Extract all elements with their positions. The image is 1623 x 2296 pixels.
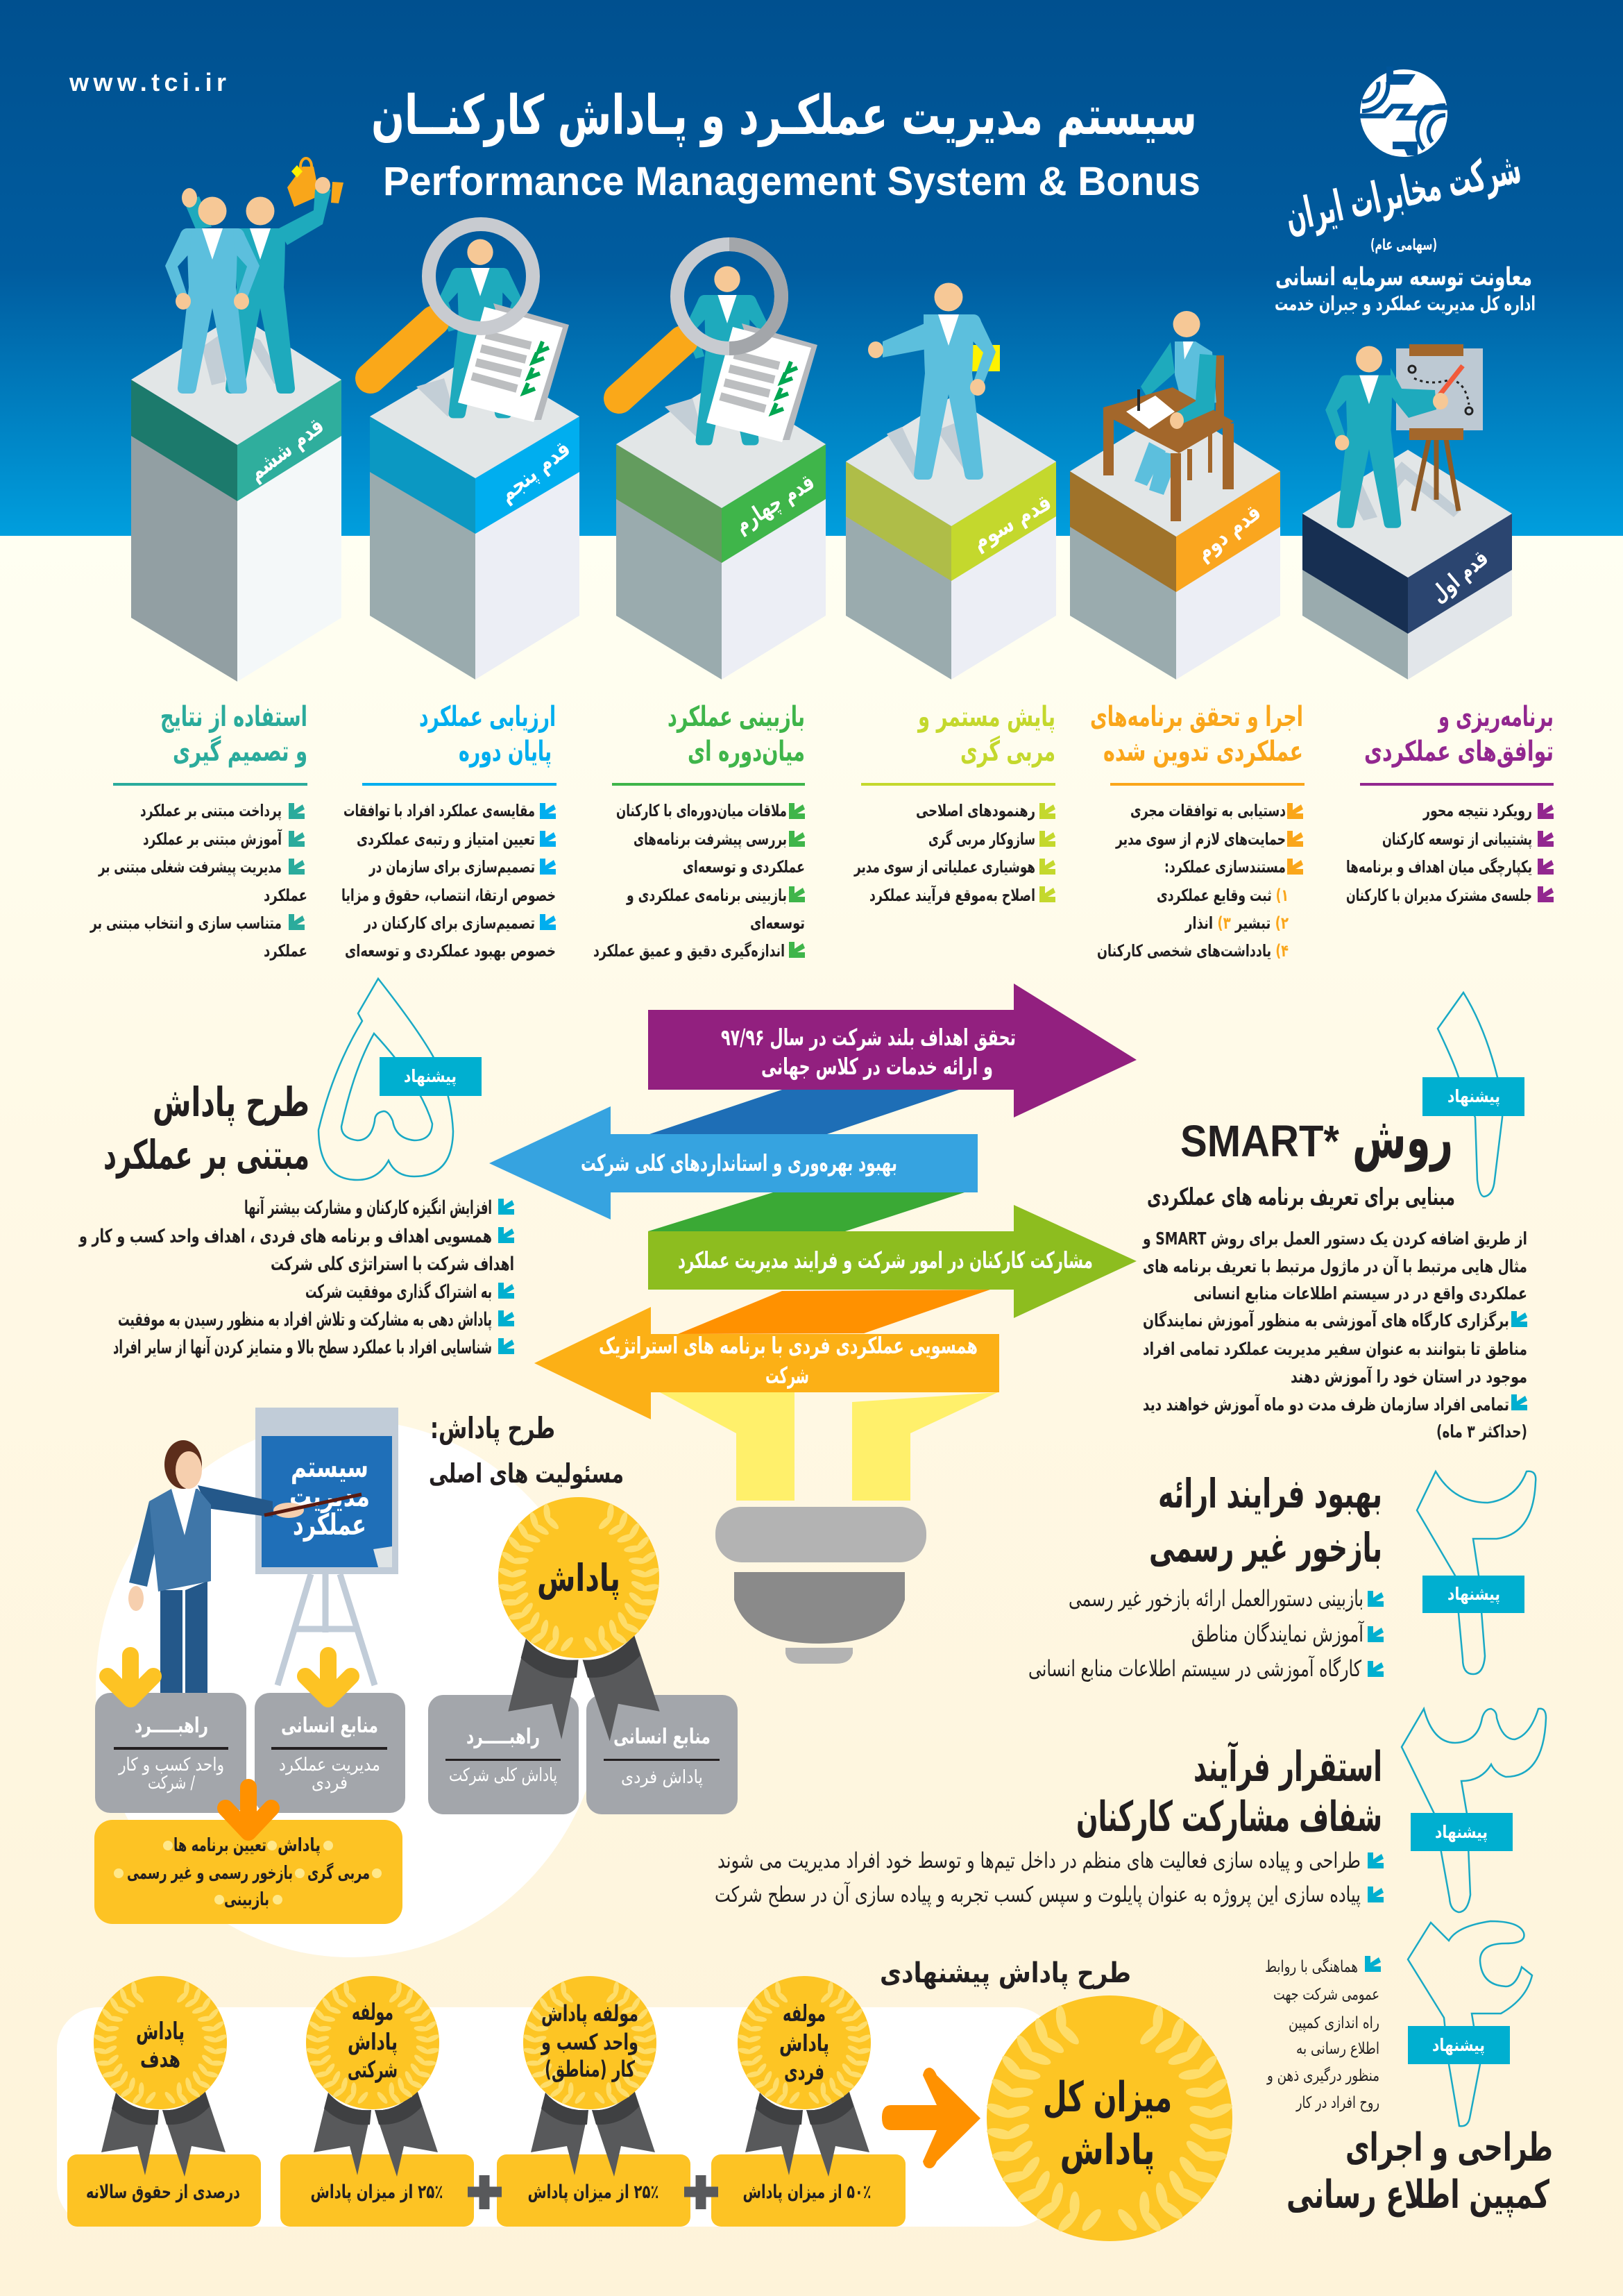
box: responsibilities list [94, 1820, 402, 1924]
arrow: down to list [226, 1787, 271, 1832]
numeral 5 outline [318, 979, 453, 1180]
box: strategy responsibility: راهبـــــرد [135, 1714, 208, 1738]
column 6 bullets: متناسب سازی و انتخاب مبتنی بر [90, 913, 282, 933]
column 5 bullets: مقایسه‌ی عملکرد افراد با توافقات [343, 801, 535, 820]
bullets: آموزش نمایندگان مناطق [1191, 1620, 1365, 1647]
figure: coach with folder [868, 283, 1000, 480]
column 2 heading: اجرا و تحقق برنامه‌های [1090, 701, 1303, 733]
fold: green [648, 1192, 965, 1231]
list text: تعیین برنامه ها [173, 1835, 266, 1856]
board text: عملکرد [293, 1508, 366, 1542]
bullets [78, 1196, 514, 1358]
step 4 label: قدم چهارم [730, 469, 819, 538]
suggestion label: پیشنهاد [404, 1066, 457, 1087]
suggestion 5 [78, 979, 514, 1358]
figure: two winners with trophy [165, 158, 343, 394]
heading: main responsibilities [429, 1411, 624, 1489]
arrow: purple: و ارائه خدمات در کلاس جهانی [761, 1053, 993, 1081]
arrow: orange: همسویی عملکردی فردی با برنامه های استراتژیک [599, 1332, 978, 1360]
arrow: green: مشارکت کارکنان در امور شرکت و فرایند مدیریت عملکرد [678, 1247, 1093, 1274]
suggestion 2 [1028, 1470, 1536, 1682]
component: business unit bonus [497, 1976, 690, 2227]
subheading: مبنایی برای تعریف برنامه های عملکردی [1147, 1183, 1455, 1211]
column 2 bullets [1097, 801, 1303, 961]
box: strategy bonus: راهبـــــرد [466, 1725, 540, 1749]
figure: magnifier over employee step 4 [619, 244, 817, 446]
column 5 bullets: تعیین امتیاز و رتبه‌ی عملکردی [357, 829, 535, 849]
column 2 bullets: ۴) یادداشت‌های شخصی کارکنان [1097, 941, 1289, 961]
suggestion label [1411, 1813, 1513, 1851]
paragraph and bullets [1141, 1229, 1527, 1442]
arrow: purple: تحقق اهداف بلند شرکت در سال ۹۷/۹۶ [721, 1024, 1016, 1052]
paragraph and bullets: عملکردی واقع در در سیستم اطلاعات منابع انسانی [1193, 1283, 1527, 1304]
medal: total bonus: میزان کل [1043, 2073, 1172, 2122]
component: corporate bonus: پاداش [348, 2028, 398, 2055]
website address: www.tci.ir [69, 68, 226, 96]
arrow to total bonus [882, 2068, 980, 2168]
box: HR responsibility: فردی [312, 1773, 348, 1793]
arrow: green [648, 1205, 1137, 1318]
column 3 bullets: هوشیاری عملیاتی از سوی مدیر [853, 857, 1035, 877]
bullets: کارگاه آموزشی در سیستم اطلاعات منابع انسانی [1028, 1655, 1362, 1682]
arrow: blue [489, 1106, 978, 1219]
heading: SMART* [1180, 1116, 1339, 1166]
presentation board [255, 1408, 398, 1685]
column 3: monitoring: مربی گری [960, 735, 1055, 768]
yellow folder [962, 345, 1000, 371]
bullet text: عمومی شرکت جهت [1273, 1986, 1379, 2004]
component: individual bonus: ۵۰٪ از میزان پاداش [742, 2181, 872, 2203]
bullets: شناسایی افراد با عملکرد سطح بالا و متمایز کردن آنها از سایر افراد [113, 1335, 492, 1358]
list text: مربی گری [307, 1862, 370, 1884]
suggestion label: پیشنهاد [1432, 2035, 1485, 2056]
pillar: step 4 [616, 380, 826, 679]
column 2 bullets: دستیابی به توافقات مجری [1130, 801, 1286, 820]
column 6 bullets: آموزش مبتنی بر عملکرد [143, 829, 282, 849]
component: individual bonus [711, 1976, 906, 2227]
component: target bonus: هدف [140, 2045, 180, 2073]
column 6: using results [90, 701, 307, 961]
pillar: step 3 [846, 397, 1056, 679]
column 2: execution [1090, 701, 1305, 961]
column 4 bullets: بررسی پیشرفت برنامه‌های [634, 829, 787, 849]
column 1 heading: برنامه‌ریزی و [1438, 701, 1554, 733]
medal: total bonus [985, 1995, 1234, 2241]
fold: orange [678, 1290, 990, 1334]
list text: بازبینی [224, 1889, 269, 1910]
column 6 bullets: عملکرد [264, 941, 307, 961]
arrow: orange: شرکت [765, 1362, 809, 1390]
heading: روش [1352, 1104, 1453, 1172]
column 4 bullets: توسعه‌ای [750, 913, 805, 933]
component: target bonus: پاداش [136, 2018, 185, 2045]
bullets [715, 1848, 1384, 1907]
column 6 bullets [90, 801, 307, 961]
component: individual bonus: پاداش [779, 2029, 829, 2057]
column 3: monitoring [853, 701, 1055, 905]
heading: طرح پاداش [153, 1079, 309, 1126]
arrow: blue: بهبود بهره‌وری و استانداردهای کلی شرکت [581, 1149, 897, 1177]
column 6: using results: و تصمیم گیری [173, 735, 307, 768]
suggestion 1 [1141, 993, 1527, 1442]
column 3 bullets: اصلاح به‌موقع فرآیند عملکرد [869, 885, 1035, 905]
bullet text: راه اندازی کمپین [1289, 2014, 1379, 2032]
front person [165, 197, 260, 394]
column 5 bullets: تصمیم‌سازی برای سازمان در [368, 857, 535, 877]
column 3 bullets: سازوکار مربی گری [928, 829, 1035, 849]
step 2 label: قدم دوم [1191, 499, 1266, 566]
column 3 bullets: رهنمودهای اصلاحی [916, 801, 1035, 820]
heading: بهبود فرایند ارائه [1158, 1470, 1382, 1518]
column 4 bullets: عملکردی و توسعه‌ای [683, 857, 805, 877]
column 1 bullets: یکپارچگی میان اهداف و برنامه‌ها [1346, 857, 1532, 877]
column 4: mid-term review [593, 701, 805, 961]
arrow: purple [648, 984, 1137, 1117]
suggestion label [380, 1057, 482, 1096]
paragraph and bullets: (حداکثر ۳ ماه) [1436, 1421, 1527, 1442]
proposed bonus plan [67, 1957, 1234, 2241]
plan title: طرح پاداش پیشنهادی [880, 1957, 1131, 1989]
component: business unit bonus: واحد کسب و [541, 2029, 638, 2055]
step 6 label: قدم ششم [243, 412, 329, 486]
bulb: colored arrow stack [489, 984, 1137, 1664]
heading: استقرار فرآیند [1193, 1741, 1382, 1791]
desk [1103, 387, 1234, 521]
bullet text: هماهنگی با روابط [1265, 1957, 1358, 1976]
list text: پاداش [278, 1835, 321, 1856]
suggestion 3: شفاف مشارکت کارکنان [1076, 1793, 1382, 1841]
paragraph and bullets: تمامی افراد سازمان ظرف مدت دو ماه آموزش خواهند دید [1143, 1394, 1509, 1415]
pillar: step 1 [1302, 450, 1512, 679]
column 2 bullets: ۱) ثبت وقایع عملکردی [1157, 886, 1289, 905]
component: corporate bonus: مولفه [352, 1998, 393, 2026]
suggestion label [1408, 2026, 1510, 2064]
list text [127, 1835, 370, 1910]
trophy [287, 158, 343, 207]
joint stock note: (سهامی عام) [1370, 237, 1437, 254]
column 1 bullets [1346, 801, 1554, 905]
box: HR bonus: منابع انسانی [613, 1725, 711, 1749]
board text: مدیریت [289, 1479, 370, 1514]
component: corporate bonus: ۲۵٪ از میزان پاداش [311, 2181, 443, 2203]
suggestion label: پیشنهاد [1447, 1584, 1500, 1605]
column 6 bullets: مدیریت پیشرفت شغلی مبتنی بر [98, 857, 282, 877]
suggestion label [1422, 1576, 1524, 1613]
board text [289, 1450, 370, 1542]
suggestion 5: مبتنی بر عملکرد [103, 1131, 309, 1179]
box: HR responsibility [255, 1693, 405, 1813]
background: blue sky [0, 0, 1623, 538]
figure: employee seated at desk [1103, 311, 1234, 521]
bullets: به اشتراک گذاری موفقیت شرکت [305, 1281, 492, 1303]
list text: بازخور رسمی و غیر رسمی [127, 1863, 293, 1884]
medal: bonus [497, 1497, 661, 1741]
column 4 heading: بازبینی عملکرد [668, 701, 805, 733]
component: corporate bonus: شرکتی [348, 2056, 398, 2084]
arrow: down to strategy [108, 1655, 153, 1699]
column 3 bullets [853, 801, 1055, 905]
step 1 label: قدم اول [1425, 545, 1493, 607]
column 6 heading: استفاده از نتایج [160, 701, 307, 733]
pillar: step 6 [131, 314, 341, 682]
column 5 bullets: خصوص ارتقا، انتصاب، حقوق و مزایا [341, 886, 556, 905]
bullets: همسویی اهداف و برنامه های فردی ، اهداف واحد کسب و کار و [78, 1226, 492, 1247]
column 5: end of period evaluation: پایان دوره [459, 736, 552, 768]
bullets [1028, 1585, 1384, 1682]
box: HR bonus [586, 1695, 738, 1814]
easel [278, 1574, 375, 1685]
logo globe [1359, 67, 1450, 157]
medal: total bonus: پاداش [1060, 2126, 1155, 2175]
suggestion label: پیشنهاد [1447, 1086, 1500, 1107]
heading [1180, 1104, 1453, 1172]
box: HR responsibility: مدیریت عملکرد [279, 1755, 380, 1775]
suggestion 3 [715, 1709, 1546, 1912]
component: corporate bonus [280, 1976, 474, 2227]
white band behind proposed bonus plan [57, 2007, 1056, 2227]
box: strategy responsibility [95, 1693, 246, 1813]
board text: سیستم [291, 1450, 368, 1484]
component: target bonus: درصدی از حقوق سالانه [86, 2181, 240, 2203]
paragraph and bullets: از طریق اضافه کردن یک دستور العمل برای روش SMART و [1141, 1229, 1527, 1249]
bullet text: روح افراد در کار [1295, 2094, 1379, 2112]
heading: main responsibilities: طرح پاداش: [430, 1411, 555, 1446]
bullets: پیاده سازی این پروژه به عنوان پایلوت و سپس کسب تجربه و پیاده سازی آن در سطح شرکت [715, 1881, 1361, 1907]
bullets: طراحی و پیاده سازی فعالیت های منظم در داخل تیم‌ها و توسط خود افراد مدیریت می شوند [717, 1848, 1361, 1873]
presenter figure [128, 1440, 362, 1713]
paragraph and bullets: موجود در استان خود را آموزش دهند [1291, 1366, 1527, 1387]
fold: blue [649, 1090, 959, 1134]
suggestion label [1422, 1077, 1524, 1116]
component: individual bonus: فردی [784, 2058, 824, 2086]
column 1: planning [1346, 701, 1554, 905]
bullet text: اطلاع رسانی به [1296, 2040, 1379, 2058]
component: individual bonus: مولفه [783, 2000, 826, 2027]
column 2 bullets: حمایت‌های لازم از سوی مدیر [1115, 829, 1286, 849]
column 3 heading: پایش مستمر و [917, 701, 1055, 733]
column 4 bullets [593, 801, 805, 961]
bullets: اهداف شرکت با استراتژی کلی شرکت [271, 1253, 514, 1275]
paragraph and bullets: برگزاری کارگاه های آموزشی به منظور آموزش نمایندگان [1143, 1310, 1509, 1331]
back person [213, 197, 295, 394]
arrow: orange [534, 1307, 999, 1419]
component: business unit bonus: مولفه پاداش [541, 2000, 638, 2027]
box: strategy bonus [428, 1695, 579, 1814]
column 6 bullets: عملکرد [264, 886, 307, 905]
numeral 1 outline [1438, 993, 1503, 1197]
flip chart [1396, 344, 1483, 511]
column 5 bullets: تصمیم‌سازی برای کارکنان در [364, 913, 535, 933]
magnifying glass [619, 244, 781, 398]
bullet text [1265, 1956, 1381, 2112]
list dots [114, 1841, 382, 1905]
title [371, 85, 1200, 204]
numeral 2 outline [1417, 1471, 1536, 1674]
column 4 bullets: اندازه‌گیری دقیق و عمیق عملکرد [593, 941, 785, 961]
box: strategy responsibility: / شرکت [148, 1773, 195, 1793]
checklist paper [706, 323, 817, 442]
step 3 label: قدم سوم [967, 489, 1056, 555]
big white backdrop circle [96, 1420, 605, 1957]
background: cream lower page [0, 536, 1623, 2296]
suggestion 2: بازخور غیر رسمی [1149, 1524, 1382, 1572]
box: HR bonus: پاداش فردی [621, 1767, 703, 1788]
bullets: افزایش انگیزه کارکنان و مشارکت بیشتر آنها [244, 1196, 492, 1219]
column 2: execution: عملکردی تدوین شده [1103, 736, 1303, 768]
plus sign [684, 2175, 718, 2209]
column 2 bullets: مستندسازی عملکرد: [1164, 857, 1286, 877]
box: strategy responsibility: واحد کسب و کار [117, 1755, 224, 1775]
plus sign [468, 2175, 502, 2209]
column 4: mid-term review: میان‌دوره ای [688, 736, 805, 768]
column 5 heading: ارزیابی عملکرد [419, 701, 556, 733]
arrow: down to HR [305, 1655, 351, 1699]
component: target bonus [67, 1976, 261, 2227]
bullets: پاداش دهی به مشارکت و تلاش افراد به منظور رسیدن به موفقیت [118, 1309, 492, 1331]
box: HR responsibility: منابع انسانی [281, 1714, 378, 1738]
component: business unit bonus: کار (مناطق) [545, 2056, 635, 2082]
figure: planner with flip chart [1325, 344, 1483, 528]
English title: Performance Management System & Bonus [383, 159, 1200, 204]
bulb light legs [660, 1392, 998, 1501]
column 5 bullets [341, 801, 556, 961]
bulb base [715, 1507, 926, 1664]
company logo and department text [1275, 67, 1536, 315]
box: strategy bonus: پاداش کلی شرکت [449, 1765, 557, 1786]
Persian title: سیستم مدیریت عملکـرد و پـاداش کارکنــان [371, 85, 1197, 147]
medal: bonus: پاداش [537, 1556, 620, 1600]
suggestion label: پیشنهاد [1435, 1822, 1488, 1843]
pillar: step 2 [1070, 406, 1280, 679]
column 2 bullets: ۲) تبشیر ۳) انذار [1184, 913, 1289, 933]
column 6 bullets: پرداخت مبتنی بر عملکرد [140, 801, 282, 820]
heading: main responsibilities: مسئولیت های اصلی [429, 1458, 624, 1489]
numeral 3 outline [1402, 1709, 1546, 1912]
step 5 label: قدم پنجم [493, 435, 575, 507]
component: business unit bonus: ۲۵٪ از میزان پاداش [527, 2181, 659, 2203]
column 1 bullets: رویکرد نتیجه محور [1422, 801, 1532, 820]
numeral 4 outline [1408, 1921, 1532, 2126]
pillar: step 5 [370, 355, 579, 679]
column 5: end of period evaluation [341, 701, 556, 961]
column 1 bullets: جلسه‌ی مشترک مدیران با کارکنان [1346, 886, 1532, 905]
column 4 bullets: بازبینی برنامه‌ی عملکردی و [626, 886, 787, 905]
column 5 bullets: خصوص بهبود عملکردی و توسعه‌ای [345, 941, 556, 961]
column 1 bullets: پشتیبانی از توسعه کارکنان [1382, 829, 1532, 849]
bullets: بازبینی دستورالعمل ارائه بازخور غیر رسمی [1069, 1585, 1363, 1612]
column 4 bullets: ملاقات میان‌دوره‌ای با کارکنان [616, 801, 787, 820]
suggestion 4 [1265, 1921, 1553, 2218]
figure: magnifier over employee step 5 [371, 224, 569, 422]
checklist paper [458, 303, 569, 422]
magnifying glass [371, 224, 533, 378]
bullet text: منظور درگیری ذهن و [1266, 2066, 1379, 2085]
